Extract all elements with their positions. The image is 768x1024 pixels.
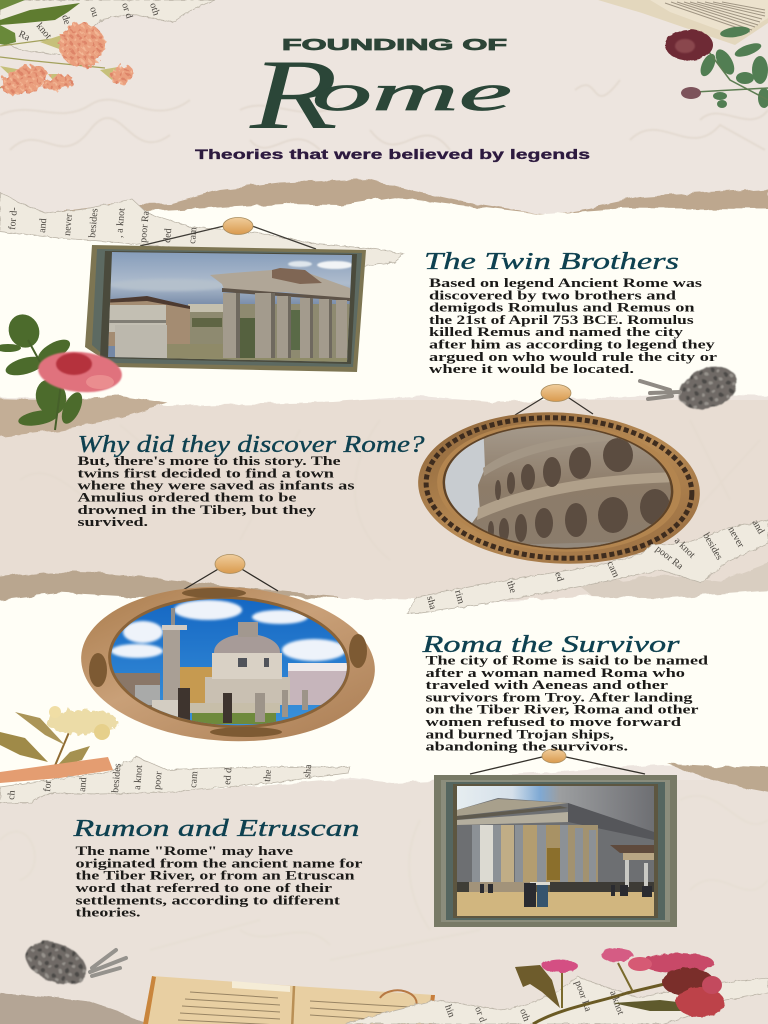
- paper strip: bottom right: hin: [442, 1003, 457, 1019]
- paper strip: right diagonal: the: [504, 580, 519, 595]
- photo scene: [108, 252, 352, 362]
- text block: Rumon and Etruscan: theories.: [76, 906, 140, 920]
- heading: Why did they discover Rome?: Why did they discover Rome?: [78, 432, 425, 458]
- text block: Rumon and Etruscan: the Tiber River, or from an Etruscan: [76, 869, 355, 883]
- cream band: The Twin Brothers: [0, 197, 768, 406]
- text block: Why did they discover Rome?: where they were saved as infants as: [78, 479, 355, 493]
- paper strip: behind first frame: and: [37, 218, 49, 233]
- paper strip: right diagonal: ed: [552, 571, 566, 583]
- subtitle: Theories that were believed by legends: [195, 146, 590, 162]
- heading: Rome script: R: [249, 39, 338, 150]
- text block: Rumon and Etruscan: The name "Rome" may have: [76, 844, 294, 858]
- text block: Rumon and Etruscan: settlements, according to different: [76, 893, 341, 907]
- paper strip: top left: Ra: [17, 29, 32, 44]
- text block: Why did they discover Rome?: twins first decided to find a town: [78, 466, 334, 480]
- picture 3: oval gold frame with Trajan's column: [77, 554, 379, 749]
- text block: The Twin Brothers: where it would be located.: [429, 362, 634, 376]
- parchment shade: middle section: [0, 400, 768, 600]
- heading: Rome script: ome: [312, 65, 512, 122]
- text block: Roma the Survivor: abandoning the survivors.: [426, 740, 628, 754]
- brown torn edge: lower right: [667, 763, 768, 794]
- paper strip: lower left: [0, 757, 350, 803]
- gold oval frame: [77, 579, 379, 749]
- title: [195, 37, 590, 162]
- paper strip: behind first frame: , a knot: [114, 207, 128, 238]
- butterfly: right: [640, 359, 743, 417]
- wooden frame: [85, 245, 366, 372]
- temple scene: [457, 786, 654, 918]
- brown torn edge: first band: [40, 179, 768, 222]
- cream band: Roma the Survivor: [0, 590, 768, 792]
- text block: The Twin Brothers: after him as according to legend they: [429, 338, 716, 352]
- open book: top right: [598, 0, 768, 45]
- heading: Roma the Survivor: Roma the Survivor: [421, 632, 680, 658]
- paper strip: behind first frame: ded: [162, 228, 174, 243]
- paper strip: lower left: the: [262, 769, 274, 782]
- orange tape: [0, 757, 113, 783]
- paper strip: right diagonal: besides: [700, 531, 725, 562]
- paper strip: right diagonal: poor Ra: [653, 544, 686, 572]
- flower: pink rose with leaves: [0, 309, 124, 430]
- paper strip: right diagonal: cam: [604, 560, 621, 580]
- paper strip: top left: ou: [87, 6, 101, 18]
- text block: Roma the Survivor: traveled with Aeneas and other: [426, 678, 669, 692]
- paper strip: lower left: and: [77, 777, 89, 792]
- paper strip: lower left: besides: [110, 763, 124, 793]
- pin and strings: [470, 749, 645, 774]
- flower: dried pink branch: [515, 948, 724, 1024]
- paper strip: top left: knot: [34, 21, 54, 42]
- paper strip: bottom right: or d: [472, 1005, 488, 1024]
- text block: The Twin Brothers: [429, 276, 718, 376]
- wooden frame: [434, 775, 677, 927]
- paper strip: lower left: for: [42, 779, 54, 792]
- paper strip: bottom right: oth: [517, 1007, 532, 1023]
- light torn edge: second band right: [578, 560, 768, 602]
- paper strip: lower left: sha: [302, 763, 314, 778]
- paper strip: top left: oth: [147, 2, 162, 17]
- picture 4: framed temple painting: [434, 749, 677, 927]
- text block: Roma the Survivor: women refused to move forward: [426, 715, 681, 729]
- flower: top left orange blossoms: [0, 0, 136, 100]
- pin and strings: [140, 218, 316, 249]
- text block: Rumon and Etruscan: word that referred to one of their: [76, 881, 333, 895]
- pin and strings: [515, 384, 593, 415]
- text block: Rumon and Etruscan: originated from the ancient name for: [76, 856, 363, 870]
- paper strip: lower left: ch: [6, 790, 18, 800]
- open book: bottom: [142, 976, 435, 1024]
- Colosseum photo: [445, 426, 671, 548]
- brown torn edge: second band left: [0, 572, 338, 606]
- text block: Why did they discover Rome?: Amulius ordered them to be: [78, 490, 297, 504]
- paper strip: right diagonal: never: [725, 525, 746, 550]
- bronze oval frame: [414, 405, 704, 571]
- text block: Roma the Survivor: and burned Trojan ships,: [426, 727, 614, 741]
- text block: The Twin Brothers: the 21st of April 753 BCE. Romulus: [429, 313, 694, 327]
- paper strip: top left: de: [59, 14, 73, 26]
- text block: Why did they discover Rome?: But, there's more to this story. The: [78, 454, 341, 468]
- text block: Roma the Survivor: after a woman named Roma who: [426, 666, 685, 680]
- text block: Roma the Survivor: The city of Rome is said to be named: [426, 654, 708, 668]
- text block: The Twin Brothers: killed Remus and named the city: [429, 325, 684, 339]
- paper strip: bottom right: [343, 977, 768, 1024]
- pin and strings: [183, 554, 278, 591]
- paper strip: right diagonal: and: [749, 518, 766, 536]
- paper strip: behind first frame: for d-: [7, 207, 20, 230]
- picture 2: oval bronze frame with Colosseum: [414, 384, 704, 571]
- text block: Roma the Survivor: survivors from Troy. After landing: [426, 690, 694, 704]
- paper strip: bottom right: poor Ra: [572, 979, 594, 1014]
- text block: The Twin Brothers: demigods Romulus and Remus on: [429, 301, 695, 315]
- text block: Roma the Survivor: on the Tiber River, Roma and other: [426, 703, 699, 717]
- heading: The Twin Brothers: The Twin Brothers: [424, 249, 679, 275]
- paper strip: lower left: ed d: [222, 767, 234, 785]
- paper strip: right diagonal: sha: [424, 595, 438, 611]
- text block: Why did they discover Rome?: drowned in the Tiber, but they: [78, 503, 317, 517]
- brown torn edge: left of middle: [0, 396, 168, 438]
- paper strip: right diagonal: [407, 518, 768, 613]
- text block: Roma the Survivor: [426, 654, 708, 754]
- heading: founding of: FOUNDING OF: [282, 37, 507, 54]
- text block: The Twin Brothers: discovered by two brothers and: [429, 288, 676, 302]
- paper strip: behind first frame: besides: [87, 208, 101, 238]
- parchment shade: lower section: [0, 780, 768, 1024]
- paper strip: lower left: a knot: [132, 764, 145, 790]
- heading: Rumon and Etruscan: Rumon and Etruscan: [72, 816, 360, 842]
- text block: Rumon and Etruscan: [76, 844, 363, 920]
- paper strip: bottom right: a knot: [607, 989, 626, 1016]
- paper strip: lower left: poor: [152, 770, 165, 790]
- text block: The Twin Brothers: argued on who would rule the city or: [429, 350, 718, 364]
- frame ornaments: [89, 588, 367, 737]
- paper strip: lower left: cam: [188, 770, 200, 788]
- butterfly: lower left: [19, 933, 126, 993]
- paper strip: right diagonal: a knot: [672, 535, 697, 561]
- flower: dried yellow blossom with tape: [0, 706, 118, 783]
- paper strip: top left: [0, 0, 215, 55]
- text block: Why did they discover Rome?: [78, 454, 355, 529]
- text block: The Twin Brothers: Based on legend Ancient Rome was: [429, 276, 702, 290]
- brown torn edge: bottom left: [0, 992, 160, 1024]
- paper strip: behind first frame: never: [62, 213, 75, 236]
- flower: top right dark rose: [665, 25, 768, 108]
- paper strip: top left: or d: [119, 2, 135, 20]
- picture 1: hanging framed photo of Roman Forum ruins: [85, 218, 366, 372]
- paper strip: behind first frame: [0, 192, 404, 266]
- church and column photo: [111, 598, 347, 726]
- text block: Why did they discover Rome?: survived.: [78, 515, 148, 529]
- paper strip: behind first frame: poor Ra: [138, 210, 152, 243]
- paper strip: right diagonal: rim: [452, 589, 466, 605]
- paper strip: behind first frame: cam: [187, 226, 199, 244]
